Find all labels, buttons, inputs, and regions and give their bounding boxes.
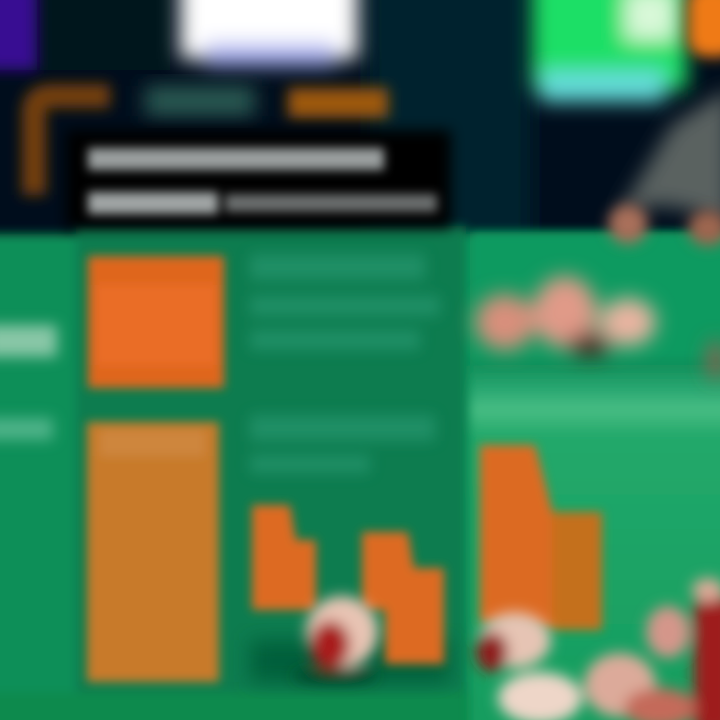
subheading orange label <box>288 88 388 118</box>
poker chips lower right <box>476 578 720 720</box>
title text lines <box>88 148 437 214</box>
logo bracket <box>34 96 110 195</box>
text block: lower right of panel <box>250 415 435 473</box>
panel: green table <box>0 226 720 720</box>
left edge labels <box>0 325 57 440</box>
bar chart: left bars <box>252 505 444 664</box>
orange corner object <box>688 0 720 57</box>
green screen <box>532 0 687 102</box>
poker chip centre <box>293 596 378 683</box>
text block: upper right of panel <box>250 254 440 350</box>
white screen <box>180 0 358 66</box>
panel: right table surface <box>470 232 720 720</box>
hands <box>608 204 720 246</box>
panel: tan text column <box>87 422 219 682</box>
subheading teal label <box>145 86 255 116</box>
panel: orange callout <box>88 256 224 388</box>
table shadow <box>250 640 450 682</box>
poker chips upper <box>475 276 720 380</box>
person in grey <box>618 88 720 225</box>
bar chart: right bars <box>480 445 602 630</box>
title block <box>66 130 451 228</box>
purple screen <box>0 0 37 70</box>
background: dark room <box>0 0 720 240</box>
